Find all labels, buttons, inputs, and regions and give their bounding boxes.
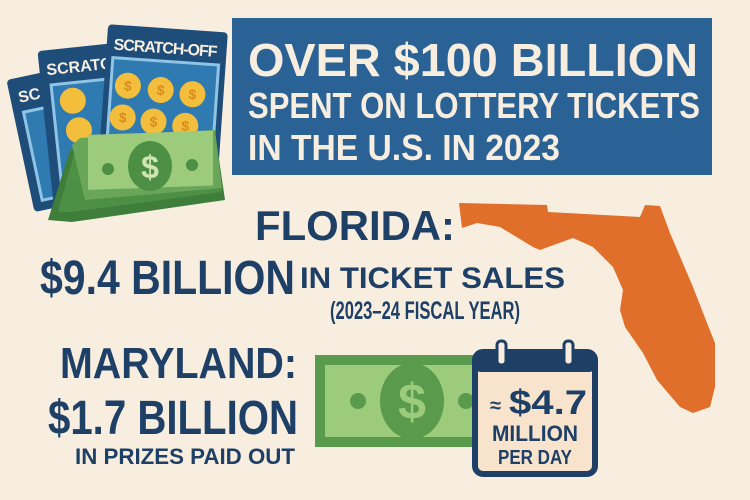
icon: scratch-off tickets and cash: $ [141,149,159,185]
title box: OVER $100 BILLION [248,34,698,86]
icon: scratch-off tickets and cash: $ [181,118,190,134]
icon: dollar bill: $ [398,374,426,430]
map: Florida [459,203,715,413]
text: Florida stat: FLORIDA: [255,202,455,249]
icon: scratch-off tickets and cash: $ [118,109,127,126]
text: Florida stat: $9.4 BILLION [40,252,295,305]
icon: scratch-off tickets and cash: $ [123,77,133,94]
icon: calendar with per-day stat: ≈ [490,395,501,417]
icon: scratch-off tickets and cash: $ [188,86,197,103]
icon: scratch-off tickets and cash: SCRATC [46,55,113,79]
icon: calendar with per-day stat: PER DAY [498,447,573,469]
title box [232,18,712,175]
icon: dollar bill [315,355,505,447]
icon: scratch-off tickets and cash: SC [17,85,42,107]
icon: calendar with per-day stat [475,341,595,474]
icon: scratch-off tickets and cash: $ [149,113,158,130]
icon: calendar with per-day stat: MILLION [492,421,578,446]
text: Florida stat [40,202,565,325]
text: Florida stat: (2023–24 FISCAL YEAR) [330,297,520,325]
icon: scratch-off tickets and cash: SCRATCH-OFF [113,37,218,61]
text: Maryland stat: MARYLAND: [60,339,297,388]
icon: calendar with per-day stat: $4.7 [509,384,587,422]
icon: scratch-off tickets and cash: $ [156,82,165,98]
text: Florida stat: IN TICKET SALES [300,262,565,295]
title box: IN THE U.S. IN 2023 [248,127,560,168]
text: Maryland stat [48,339,298,469]
text: Maryland stat: $1.7 BILLION [48,392,298,445]
icon: scratch-off tickets and cash [6,24,228,222]
text: Maryland stat: IN PRIZES PAID OUT [75,444,296,469]
